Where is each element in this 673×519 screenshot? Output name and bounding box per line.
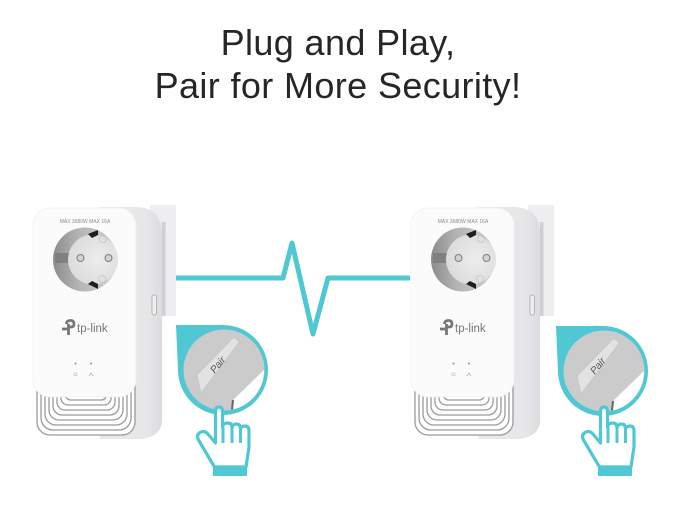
title bbox=[155, 22, 521, 106]
callout: left pair button zoom: Pair bbox=[208, 354, 229, 376]
status LEDs bbox=[74, 362, 93, 376]
pulse line connecting devices bbox=[176, 243, 410, 334]
wall plate bbox=[528, 205, 554, 316]
pair button bbox=[197, 337, 239, 393]
device: left powerline adapter bbox=[33, 205, 176, 439]
vent grille bbox=[37, 360, 135, 435]
icon: left pointing hand bbox=[198, 407, 249, 476]
pair button bbox=[577, 338, 619, 394]
vent grille bbox=[415, 360, 513, 435]
wall plate bbox=[150, 205, 176, 316]
tp-link logo: tp-link bbox=[455, 323, 486, 335]
body bbox=[478, 207, 540, 439]
icon: right pointing hand bbox=[583, 407, 634, 476]
callout: right pair button zoom: Pair bbox=[588, 355, 609, 377]
tp-link logo bbox=[440, 320, 486, 335]
side pair button bbox=[152, 295, 156, 315]
title: Pair for More Security! bbox=[155, 65, 521, 106]
side pair button bbox=[530, 295, 534, 315]
rating text: MAX 3680W MAX 16A bbox=[60, 219, 111, 225]
callout: right pair button zoom bbox=[556, 326, 648, 416]
tp-link logo: tp-link bbox=[77, 323, 108, 335]
callout: left pair button zoom bbox=[176, 325, 268, 415]
socket bbox=[431, 228, 496, 292]
tp-link logo bbox=[62, 320, 108, 335]
rating text: MAX 3680W MAX 16A bbox=[438, 219, 489, 225]
title: Plug and Play, bbox=[221, 22, 455, 63]
body bbox=[100, 207, 162, 439]
front plate bbox=[411, 208, 514, 397]
device: right powerline adapter bbox=[411, 205, 554, 439]
socket bbox=[53, 228, 118, 292]
front plate bbox=[33, 208, 136, 397]
status LEDs bbox=[452, 362, 471, 376]
